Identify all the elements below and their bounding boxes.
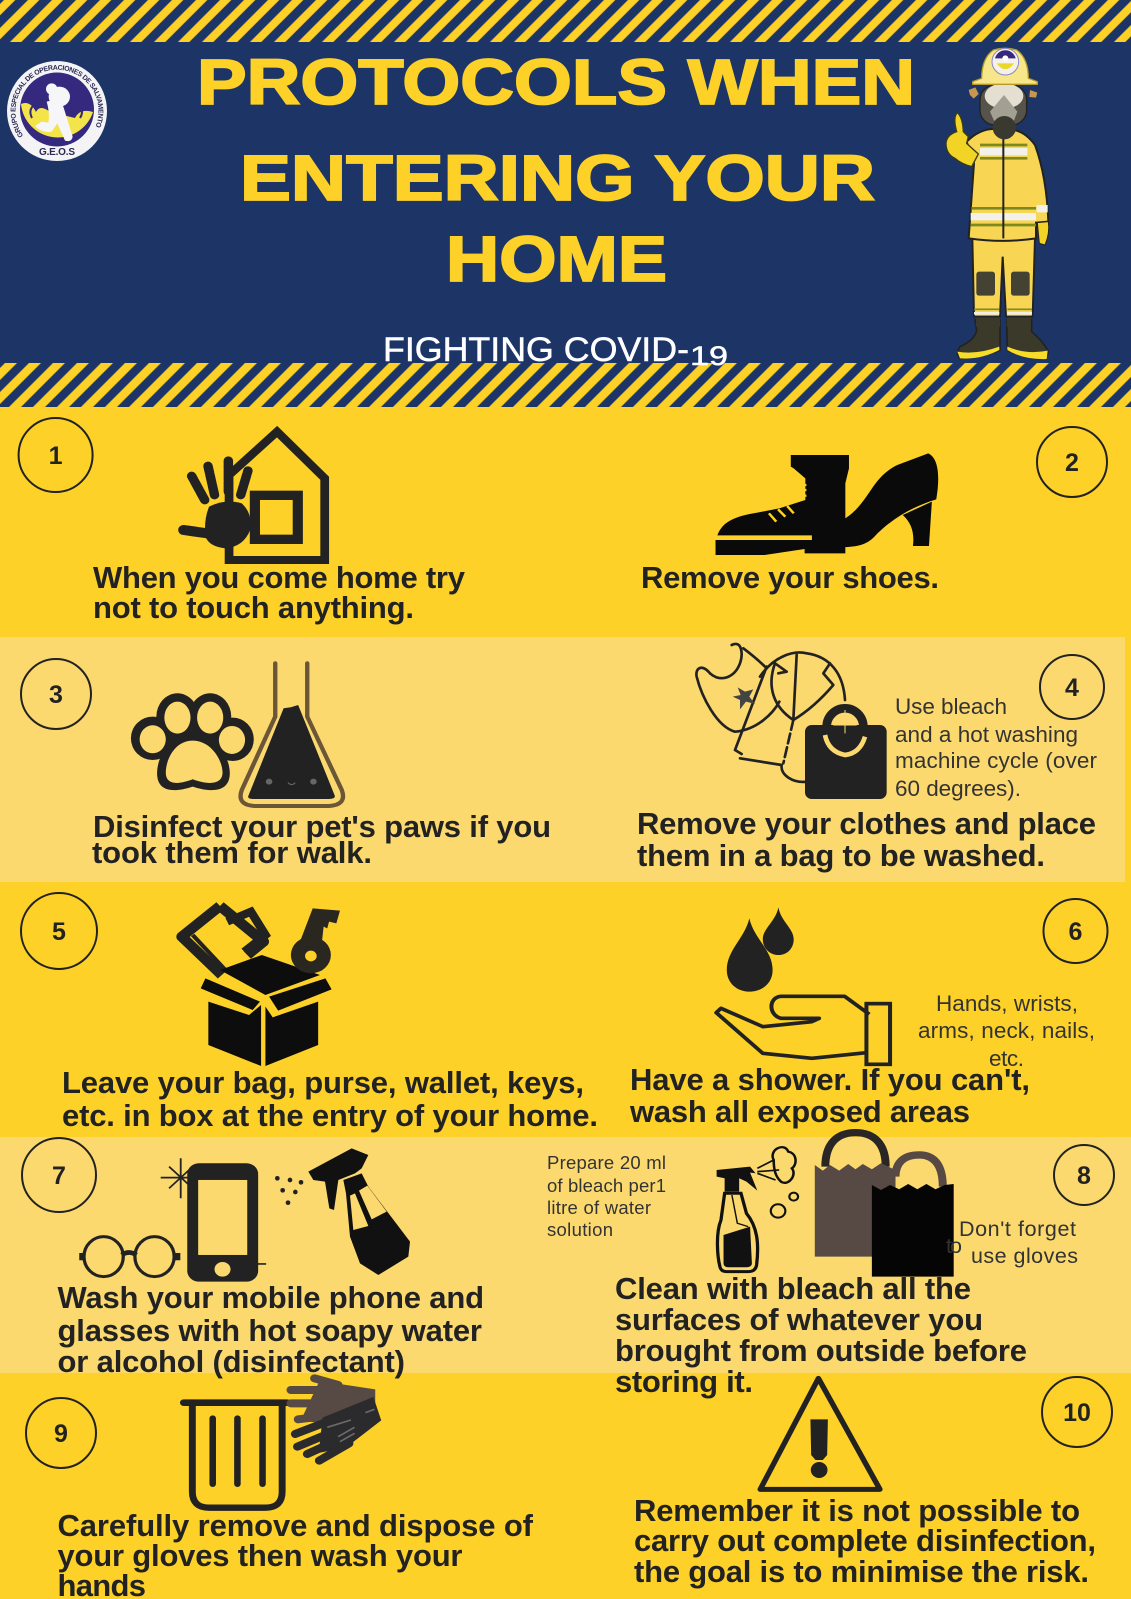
subtitle: FIGHTING COVID- xyxy=(383,331,689,369)
text: wash all exposed areas xyxy=(629,1094,970,1129)
text: carry out complete disinfection, xyxy=(634,1523,1096,1558)
number 9: 9 xyxy=(54,1420,68,1448)
text: Remove your shoes. xyxy=(641,560,939,595)
icon: spray bottle xyxy=(717,1147,798,1272)
note: gloves: Don't forget xyxy=(959,1217,1076,1241)
text: your gloves then wash your xyxy=(58,1538,462,1573)
note: bleach: Use bleach xyxy=(895,694,1007,719)
number 8 xyxy=(1054,1145,1114,1205)
note: bleach dilution: Prepare 20 ml xyxy=(547,1152,666,1173)
text: Wash your mobile phone and xyxy=(58,1280,484,1315)
text xyxy=(92,809,551,870)
note: gloves xyxy=(946,1217,1078,1268)
note: bleach: machine cycle (over xyxy=(895,748,1098,773)
number 9 xyxy=(26,1398,96,1468)
text: Disinfect your pet's paws if you xyxy=(93,809,551,844)
note: areas: arms, neck, nails, xyxy=(918,1018,1095,1043)
icon: box with wallet and key xyxy=(182,906,340,1066)
text xyxy=(615,1271,1027,1399)
panel: step 7 xyxy=(22,1138,484,1379)
note: bleach dilution: litre of water xyxy=(547,1197,651,1218)
title xyxy=(197,46,915,295)
text xyxy=(637,806,1096,873)
icon: glasses and phone xyxy=(79,1158,266,1282)
subtitle: 19 xyxy=(690,341,728,371)
text: Carefully remove and dispose of xyxy=(58,1508,534,1543)
number 2: 2 xyxy=(1065,449,1079,477)
text: storing it. xyxy=(615,1364,753,1399)
note: gloves: use gloves xyxy=(971,1244,1078,1268)
icon: gloves xyxy=(291,1378,380,1461)
icon: water drops and hand xyxy=(716,907,890,1064)
icon: hand on house xyxy=(184,432,325,560)
text: them in a bag to be washed. xyxy=(637,838,1045,873)
note: bleach: and a hot washing xyxy=(895,722,1078,747)
title: PROTOCOLS WHEN xyxy=(197,46,915,118)
number 6: 6 xyxy=(1069,918,1082,946)
icon: clothes and bag xyxy=(696,644,887,799)
title: HOME xyxy=(446,223,667,295)
icon: shopping bags xyxy=(815,1133,954,1277)
text: or alcohol (disinfectant) xyxy=(58,1344,405,1379)
title: ENTERING YOUR xyxy=(240,142,875,214)
icon: boot and heeled shoe xyxy=(716,453,938,555)
text: Remove your clothes and place xyxy=(637,806,1096,841)
number 5: 5 xyxy=(52,918,66,946)
text xyxy=(93,560,466,625)
text xyxy=(62,1065,598,1133)
band: light row 7-8 xyxy=(0,1137,1131,1373)
icon: firefighter xyxy=(946,48,1049,359)
panel: step 3 xyxy=(21,659,551,870)
note: bleach xyxy=(895,694,1098,801)
panel: step 2 xyxy=(641,427,1107,595)
band: light row 3-4 xyxy=(0,637,1125,882)
number 3 xyxy=(21,659,91,729)
number 6 xyxy=(1044,899,1108,963)
number 1: 1 xyxy=(49,442,63,470)
icon: warning triangle xyxy=(760,1378,880,1489)
number 2 xyxy=(1037,427,1107,497)
note: areas: etc. xyxy=(989,1046,1024,1071)
logo: G.E.O.S badge: GRUPO ESPECIAL DE OPERACIONES DE SALVAMENTO xyxy=(10,65,104,138)
text: Clean with bleach all the xyxy=(615,1271,971,1306)
note: bleach: 60 degrees). xyxy=(895,776,1021,801)
logo: G.E.O.S badge xyxy=(7,61,107,161)
text xyxy=(58,1280,484,1379)
text: took them for walk. xyxy=(92,835,372,870)
icon: flask xyxy=(241,663,343,806)
number 5 xyxy=(21,893,97,969)
text: not to touch anything. xyxy=(93,590,414,625)
text: Have a shower. If you can't, xyxy=(630,1062,1030,1097)
text: When you come home try xyxy=(93,560,466,595)
panel: step 1 xyxy=(19,418,466,625)
text xyxy=(58,1508,534,1599)
logo: G.E.O.S badge: G.E.O.S xyxy=(39,147,75,158)
number 1 xyxy=(19,418,93,492)
number 7: 7 xyxy=(52,1162,66,1190)
panel: step 6 xyxy=(629,899,1108,1129)
text: Leave your bag, purse, wallet, keys, xyxy=(62,1065,584,1100)
note: areas: Hands, wrists, xyxy=(936,991,1078,1016)
text: brought from outside before xyxy=(615,1333,1027,1368)
icon: spray bottle xyxy=(275,1148,410,1275)
panel: step 4 xyxy=(637,644,1104,873)
text: glasses with hot soapy water xyxy=(58,1313,482,1348)
text: Remember it is not possible to xyxy=(634,1493,1080,1528)
note: bleach dilution xyxy=(547,1152,666,1240)
number 8: 8 xyxy=(1077,1162,1091,1190)
note: areas xyxy=(918,991,1095,1071)
number 7 xyxy=(22,1138,96,1212)
panel: step 9 xyxy=(26,1378,534,1599)
text: surfaces of whatever you xyxy=(615,1302,983,1337)
text: etc. in box at the entry of your home. xyxy=(62,1098,598,1133)
text xyxy=(634,1493,1096,1589)
number 4: 4 xyxy=(1065,674,1079,702)
panel: step 8 xyxy=(547,1133,1114,1399)
panel: step 5 xyxy=(21,893,598,1133)
text: the goal is to minimise the risk. xyxy=(634,1554,1089,1589)
note: bleach dilution: solution xyxy=(547,1219,613,1240)
number 3: 3 xyxy=(49,681,63,709)
panel: step 10 xyxy=(634,1377,1112,1589)
number 4 xyxy=(1040,655,1104,719)
icon: paw xyxy=(131,693,254,790)
text xyxy=(629,1062,1030,1129)
icon: bin xyxy=(184,1403,287,1508)
number 10: 10 xyxy=(1063,1399,1091,1427)
note: gloves: to xyxy=(946,1234,962,1258)
note: bleach dilution: of bleach per1 xyxy=(547,1175,666,1196)
number 10 xyxy=(1042,1377,1112,1447)
header panel xyxy=(0,0,1131,407)
